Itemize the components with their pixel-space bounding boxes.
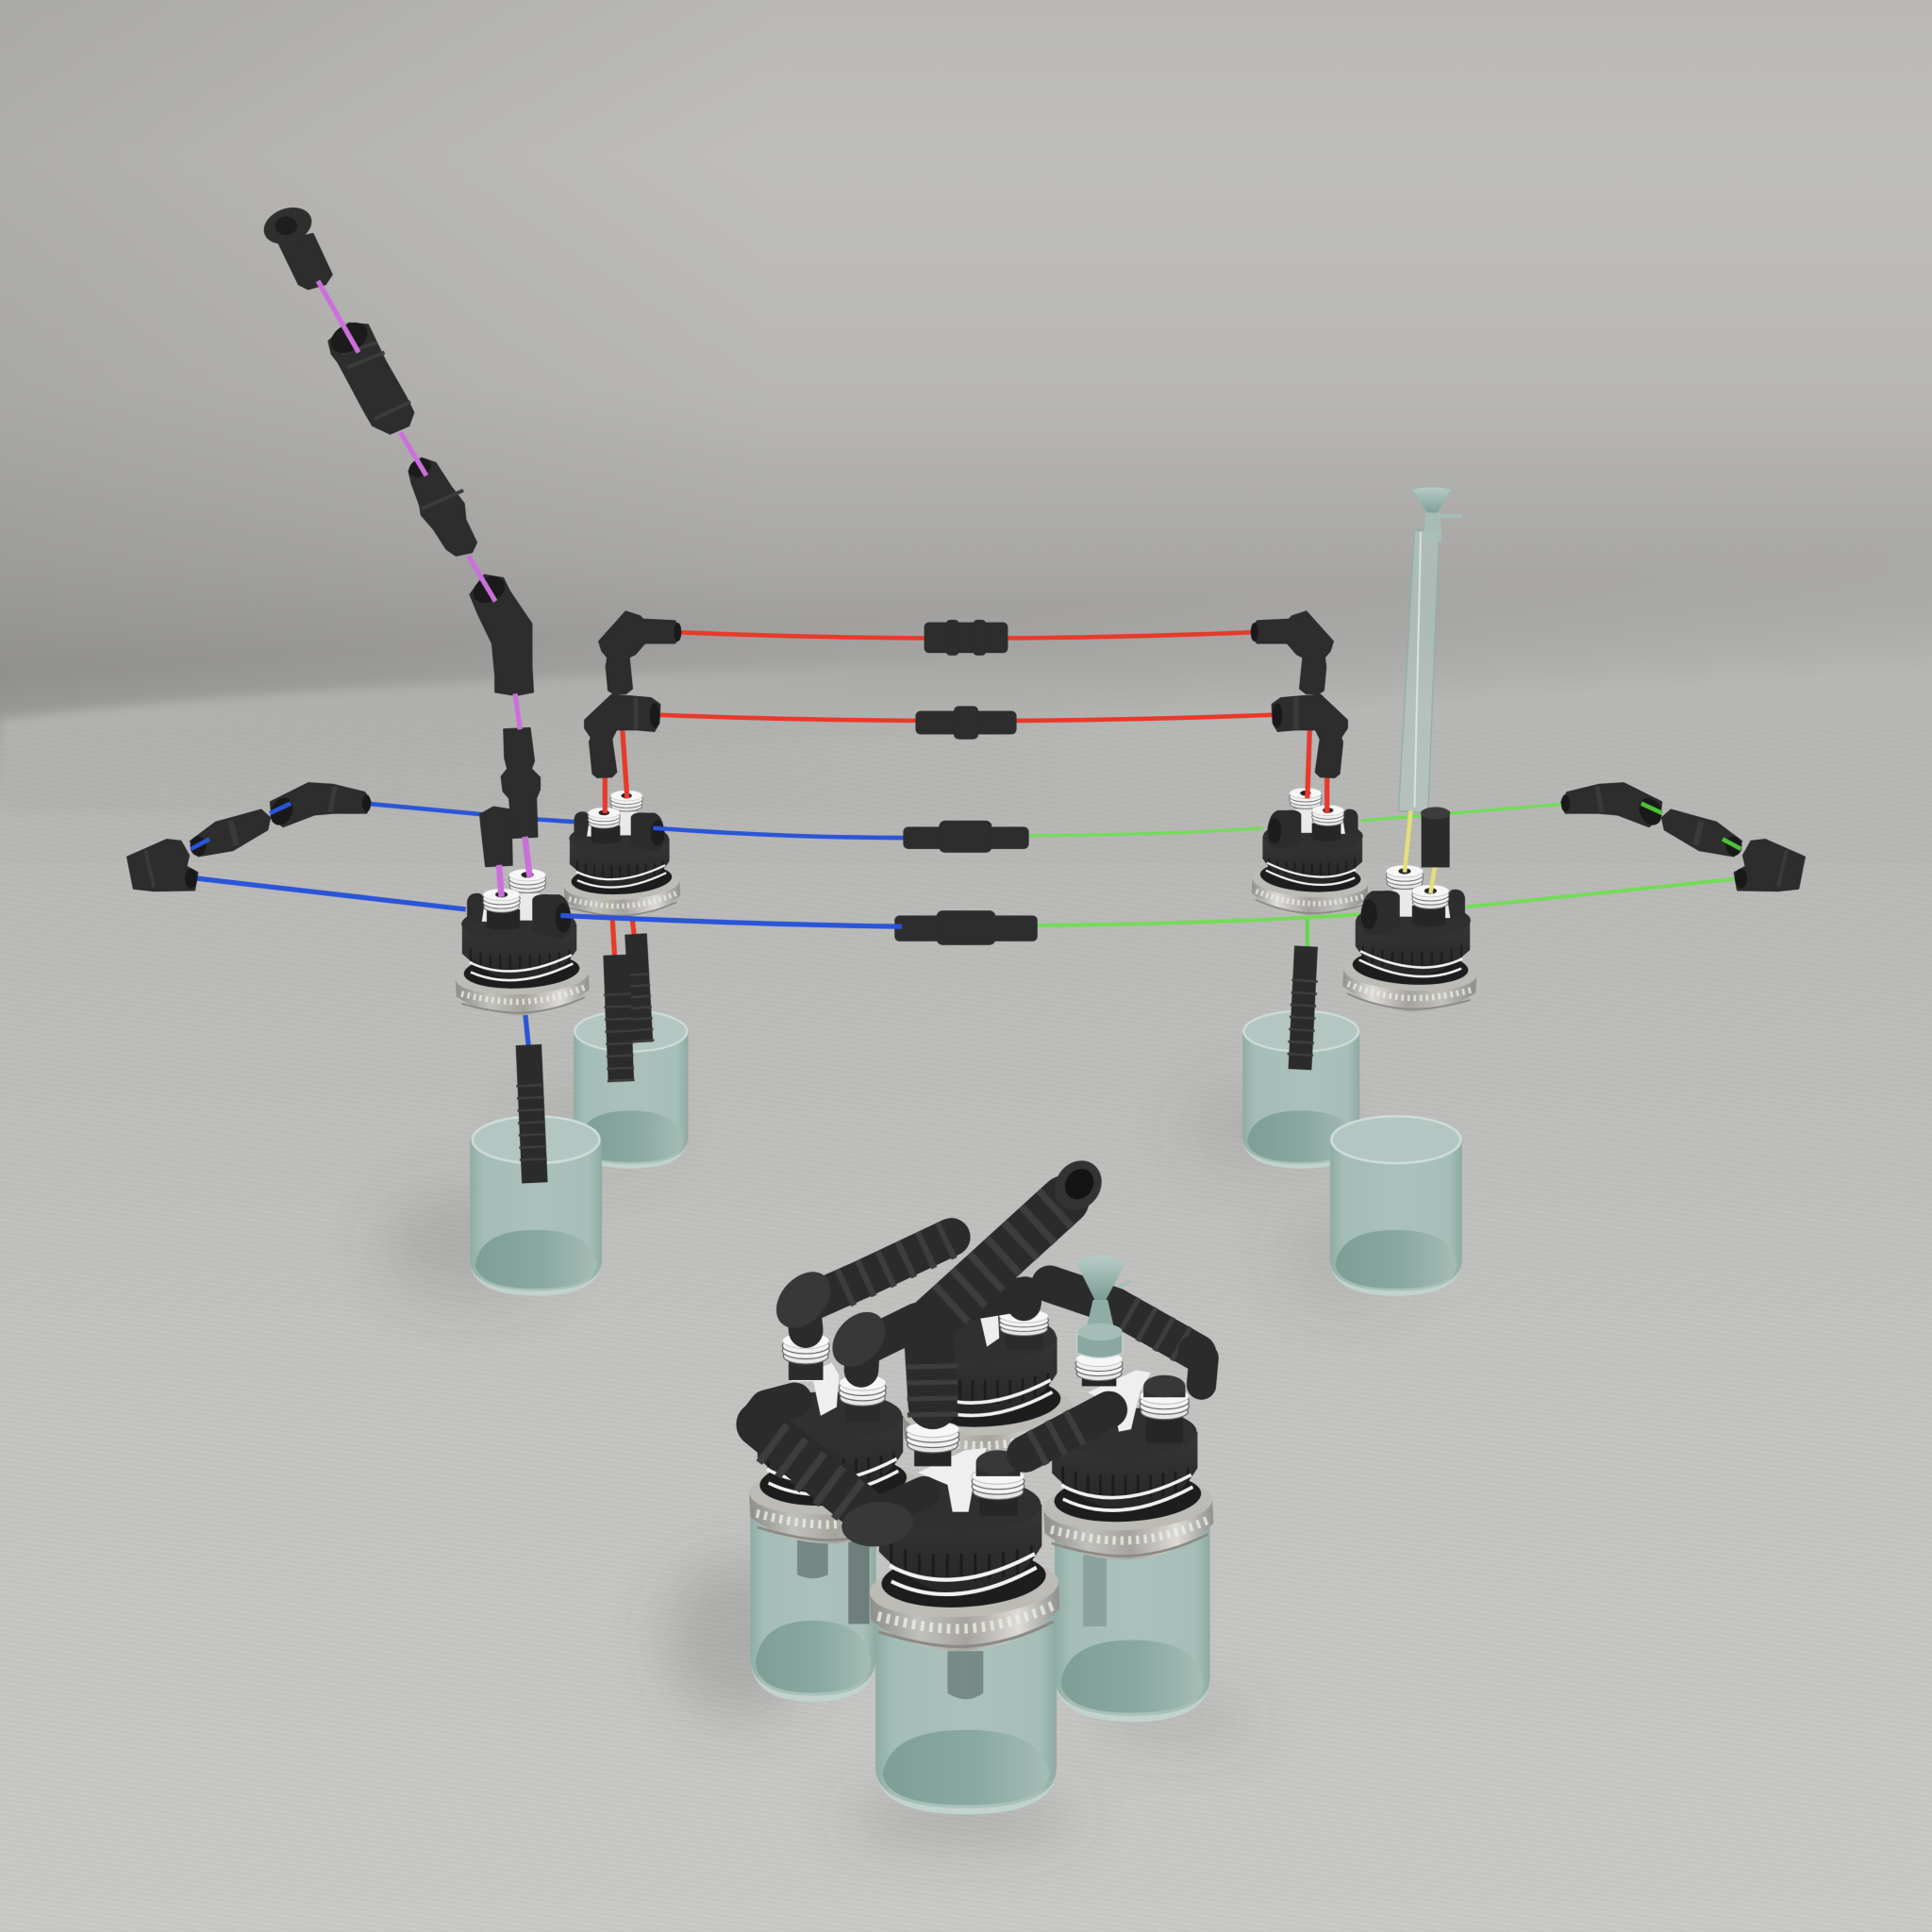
blue tubing (188, 804, 909, 909)
assembled rear lid (902, 1309, 1074, 1470)
red elbows: right (1251, 611, 1347, 777)
assembled right lid (1042, 1407, 1215, 1564)
connector: lower blue-green coupling (894, 910, 1038, 945)
dip tubes in the open jars (525, 918, 1307, 1183)
central Y stem (928, 1152, 1111, 1417)
connector: upper red coupling (924, 620, 1008, 656)
assembled left lid (748, 1391, 921, 1548)
blue connectors: left corner (127, 783, 371, 891)
assembled front jar (875, 1614, 1057, 1814)
assembled unit (748, 1152, 1215, 1814)
lid: rear left (563, 791, 681, 921)
post caps (975, 1375, 1185, 1476)
glass bowl (1075, 1256, 1131, 1357)
green connectors: right corner (1561, 783, 1805, 891)
ring stacks on the posts (782, 1333, 1189, 1516)
floor shadows (382, 1084, 1405, 1842)
assembled left jar (750, 1509, 876, 1702)
background wall (0, 0, 1932, 862)
yellow tubing and cap (1405, 808, 1450, 893)
jar: rear left, open (574, 1011, 688, 1169)
lid: front left, exploded (455, 869, 591, 1019)
red tubing (605, 632, 1327, 813)
connector: upper blue-green coupling (903, 821, 1029, 853)
rear-left frame tube with elbow (765, 1237, 951, 1339)
lid: rear right (1251, 788, 1369, 918)
jar: rear right, open (1242, 1011, 1359, 1169)
magenta tubing and connector chain (258, 201, 540, 897)
green tubing (1025, 804, 1740, 925)
glass stem tube with funnel (1398, 487, 1462, 813)
middle elbow (822, 1302, 918, 1377)
blue lower tube over lid (560, 915, 902, 926)
assembled right jar (1055, 1528, 1210, 1722)
floor (0, 542, 1932, 1932)
jar: front right, open (1330, 1116, 1462, 1296)
red elbows: left (585, 611, 681, 777)
connector: lower red coupling (915, 706, 1017, 740)
lid: front right, exploded (1341, 865, 1477, 1015)
assembled front lid (868, 1477, 1061, 1656)
jar: front left, open (470, 1116, 602, 1296)
white tee fittings (790, 1363, 1151, 1512)
right-side frame tubes (1025, 1284, 1204, 1454)
front-left frame tube with elbows (754, 1400, 924, 1550)
